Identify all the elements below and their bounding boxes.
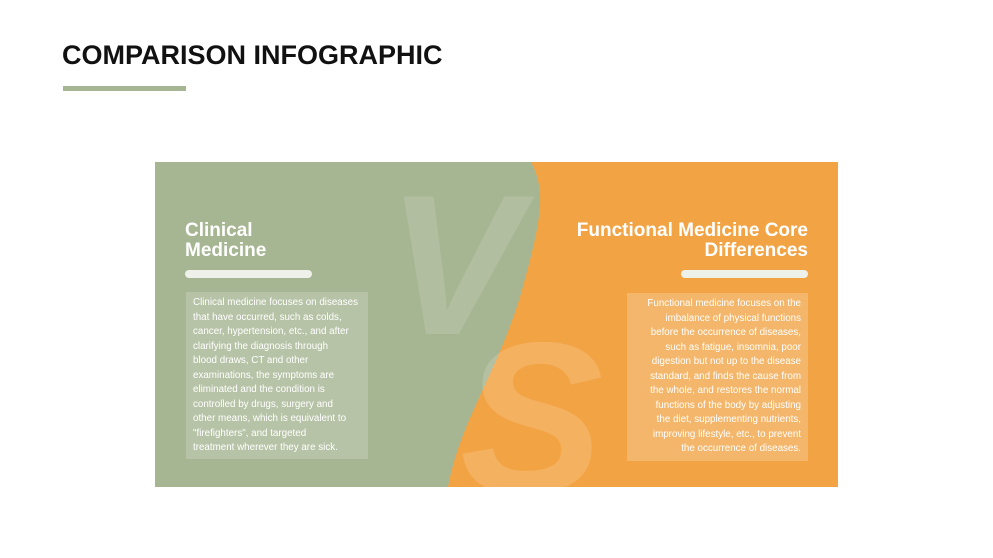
left text box bbox=[186, 292, 368, 459]
right text box: improving lifestyle, etc., to prevent bbox=[653, 428, 801, 440]
left text box: cancer, hypertension, etc., and after bbox=[193, 326, 349, 337]
right heading bbox=[577, 220, 808, 261]
left heading bbox=[185, 220, 266, 261]
right bar bbox=[681, 270, 808, 278]
right text box: such as fatigue, insomnia, poor bbox=[665, 342, 801, 352]
left text box: eliminated and the condition is bbox=[193, 384, 325, 395]
right text box: the occurrence of diseases. bbox=[681, 443, 801, 454]
left text box: clarifying the diagnosis through bbox=[193, 340, 328, 352]
left text box: blood draws, CT and other bbox=[193, 355, 308, 366]
right text box: standard, and finds the cause from bbox=[650, 370, 801, 382]
left heading: Medicine bbox=[185, 240, 266, 261]
right text box: before the occurrence of diseases, bbox=[651, 327, 801, 338]
title underline bbox=[63, 86, 186, 91]
left text box: Clinical medicine focuses on diseases bbox=[193, 297, 358, 308]
right text box: Functional medicine focuses on the bbox=[647, 298, 801, 309]
right text box: digestion but not up to the disease bbox=[652, 356, 801, 367]
left text box: controlled by drugs, surgery and bbox=[193, 398, 333, 410]
left text box: other means, which is equivalent to bbox=[193, 413, 346, 424]
right text box: imbalance of physical functions bbox=[665, 312, 801, 324]
left text box: "firefighters", and targeted bbox=[193, 428, 306, 438]
left text box: treatment wherever they are sick. bbox=[193, 442, 338, 453]
comparison panel bbox=[155, 162, 838, 487]
left heading: Clinical bbox=[185, 220, 253, 241]
right text box bbox=[627, 293, 808, 461]
title: COMPARISON INFOGRAPHIC bbox=[62, 40, 443, 70]
right heading: Differences bbox=[704, 240, 808, 261]
left text box: that have occurred, such as colds, bbox=[193, 312, 342, 322]
left text box: examinations, the symptoms are bbox=[193, 370, 334, 380]
background shapes and VS letters bbox=[155, 162, 838, 487]
right heading: Functional Medicine Core bbox=[577, 220, 808, 241]
right text box: the diet, supplementing nutrients, bbox=[657, 414, 801, 425]
left bar bbox=[185, 270, 312, 278]
right text box: the whole, and restores the normal bbox=[650, 385, 801, 396]
right text box: functions of the body by adjusting bbox=[656, 400, 801, 410]
